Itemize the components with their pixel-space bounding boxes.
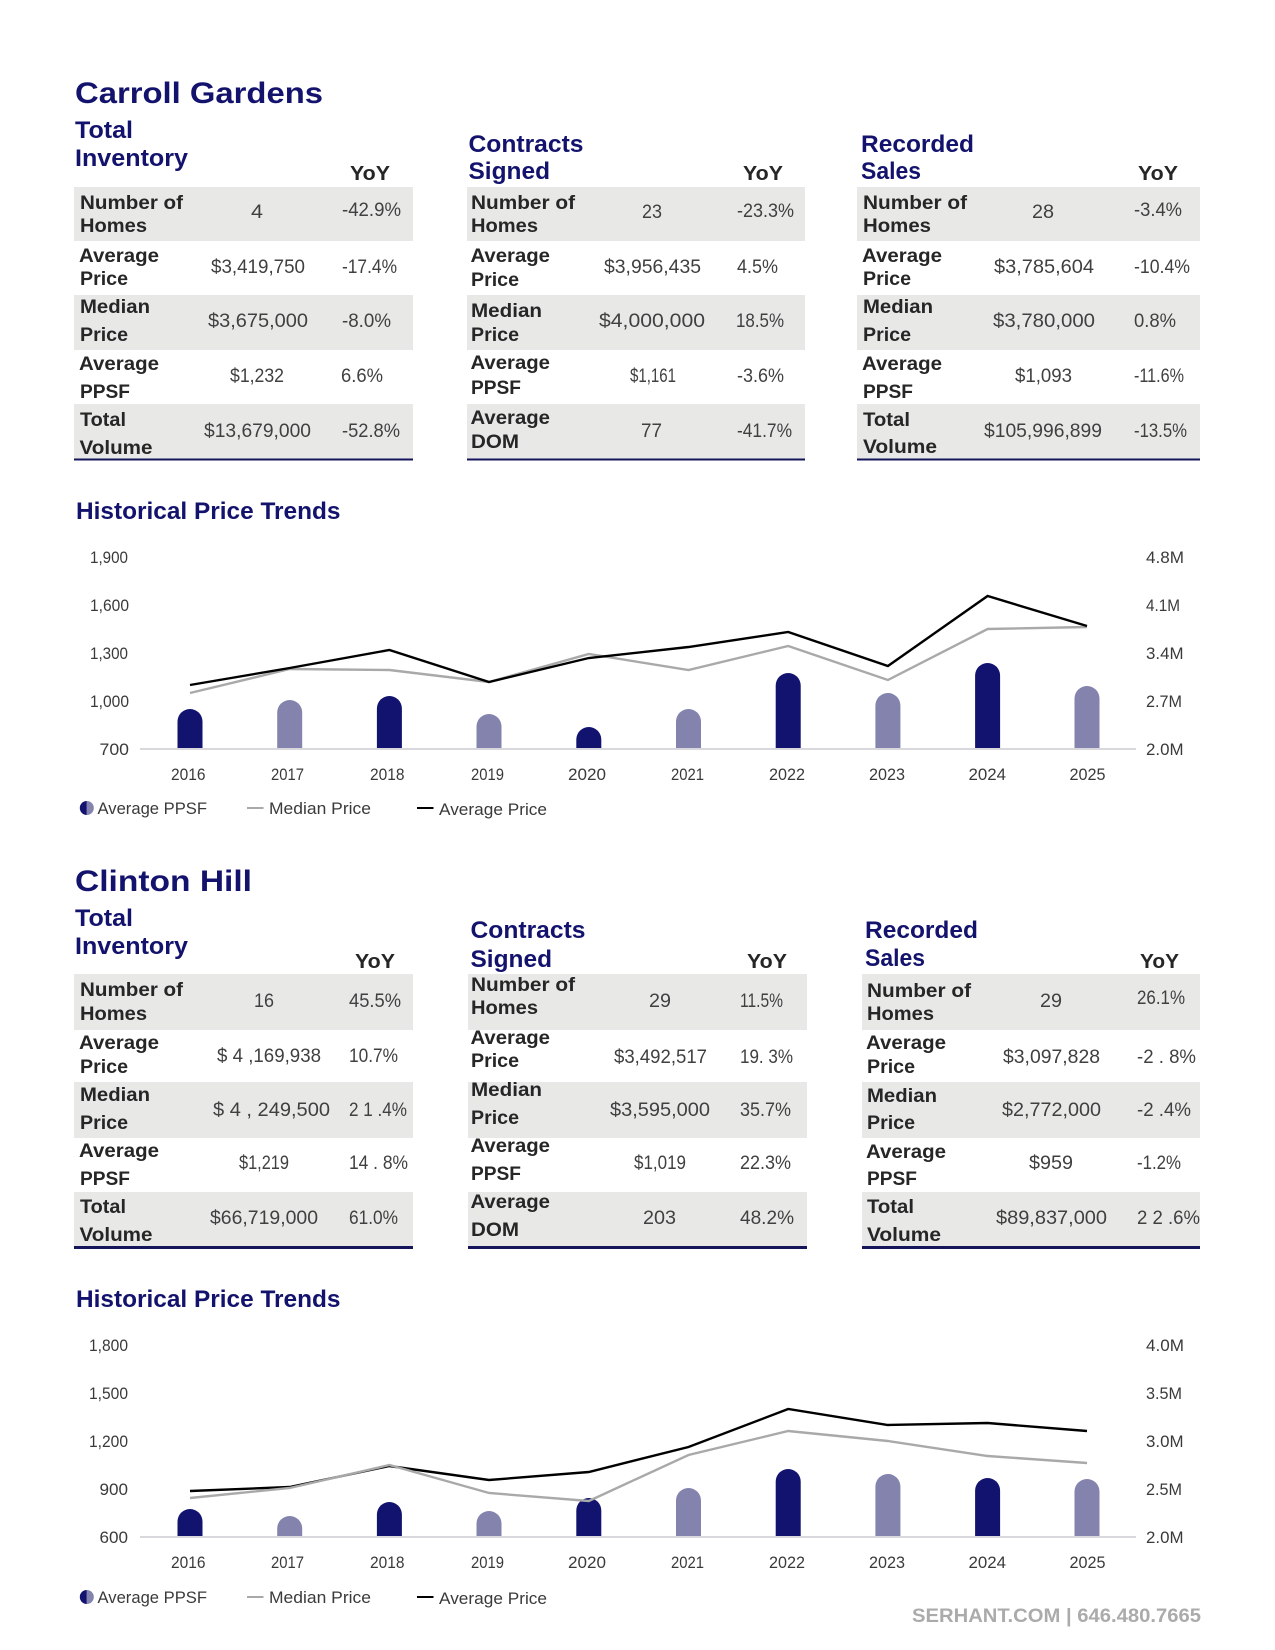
row: Median Price: Median [471,1080,542,1101]
row: Average Price: Price [471,1051,519,1072]
heading: Recorded Sales [865,917,978,972]
x axis years: 2018 [370,766,404,784]
row: Average DOM: 203 [643,1208,676,1229]
row: Average Price: Price [471,270,519,291]
row: Number of Homes: 28 [1032,202,1054,223]
row: Average PPSF [862,354,1184,403]
row: Median Price: 18.5% [736,311,784,332]
row: Average DOM: 77 [641,421,662,442]
row: Median Price: Median [471,301,542,322]
row: Number of Homes: Homes [471,216,538,237]
column heading: YoY: YoY [1140,951,1180,973]
left axis labels: 1,600 [90,597,129,615]
row: Number of Homes [467,187,805,241]
row: Median Price: Median [863,297,933,318]
row: Number of Homes: Number of [867,981,972,1002]
row: Number of Homes: Number of [80,980,184,1001]
row: Total Volume: Total [80,410,126,431]
row: Average PPSF: -3.6% [737,366,784,387]
row: Average Price [470,246,778,291]
heading: Recorded Sales [861,131,974,185]
heading: Historical Price Trends: Historical Price Trends [76,1286,340,1313]
heading: Contracts Signed: Signed [470,946,552,973]
row: Average Price: Price [80,269,128,290]
row: Average Price: 4.5% [737,257,778,278]
row: Average Price: $3,956,435 [604,257,701,278]
left axis labels: 1,500 [89,1385,128,1403]
heading: Contracts Signed [470,917,586,973]
row: Average DOM: DOM [471,1220,519,1241]
left axis labels: 1,300 [90,645,128,663]
row: Number of Homes: Homes [471,998,538,1019]
line: Median Price [190,1431,1087,1501]
row: Number of Homes: 45.5% [349,991,401,1012]
heading: Contracts Signed: Signed [468,158,550,185]
row: Number of Homes: -42.9% [342,200,401,221]
row: Average DOM [467,404,805,460]
row: Total Volume: Volume [867,1225,941,1246]
panel: Total Inventory table [74,905,413,1249]
row: Average Price: $3,419,750 [211,257,305,278]
row: Average PPSF: Average [866,1142,946,1163]
row: Median Price: -2 .4% [1137,1100,1191,1121]
row: Median Price: 35.7% [740,1100,791,1121]
row: Average PPSF: -11.6% [1134,366,1184,387]
row: Total Volume: -52.8% [342,421,400,442]
row: Average PPSF: Average [862,354,942,375]
heading: Recorded Sales: Recorded [865,917,978,944]
left axis labels: 1,200 [89,1433,128,1451]
baseline axis [140,748,1136,750]
left axis labels: 1,800 [89,1337,128,1355]
right axis labels: 2.0M [1146,1529,1184,1547]
row: Median Price: $2,772,000 [1002,1100,1101,1121]
x axis years: 2022 [769,1554,805,1572]
row: Average Price: $3,492,517 [614,1047,707,1068]
x axis years: 2021 [671,1554,704,1572]
row: Total Volume: $13,679,000 [204,421,311,442]
row: Number of Homes: 4 [251,202,263,223]
title: Carroll Gardens: Carroll Gardens [75,77,323,110]
x axis years: 2017 [271,766,304,784]
row: Average Price: $3,785,604 [994,257,1094,278]
row: Average PPSF [470,353,784,399]
panel: Contracts Signed table [468,917,807,1249]
left axis labels: 700 [100,741,129,759]
row: Total Volume [862,1192,1200,1249]
row: Average PPSF: $1,019 [634,1153,686,1174]
left axis labels: 900 [100,1481,128,1499]
row: Average PPSF: PPSF [80,1169,130,1190]
column heading: YoY: YoY [355,951,396,973]
x axis years: 2017 [271,1554,304,1572]
heading: Total Inventory: Total [75,905,133,932]
legend: Median Price [269,800,371,818]
row: Average PPSF [79,1141,408,1190]
x axis years [171,1554,1106,1572]
right axis labels [1146,549,1184,759]
row: Average DOM: -41.7% [737,421,792,442]
right axis labels: 3.0M [1146,1433,1184,1451]
left axis labels: 600 [100,1529,128,1547]
row: Average Price [862,246,1190,290]
section: Clinton Hill [74,865,1200,1608]
heading: Total Inventory [75,117,188,172]
line: Average Price [190,596,1087,685]
row: Average PPSF: 6.6% [341,366,383,387]
row: Average Price: Price [867,1057,915,1078]
row: Average PPSF [79,354,383,403]
panel: Total Inventory table [74,117,413,460]
row: Average PPSF [470,1136,791,1185]
row: Average DOM: Average [470,1192,550,1213]
section: Carroll Gardens [74,77,1200,819]
row: Median Price: Median [80,1085,150,1106]
row: Total Volume: Total [80,1197,126,1218]
row: Median Price [857,295,1200,350]
row: Number of Homes: 29 [649,991,671,1012]
left axis labels: 1,900 [90,549,128,567]
right axis labels: 2.7M [1146,693,1182,711]
row: Number of Homes: Homes [867,1004,934,1025]
right axis labels: 4.8M [1146,549,1184,567]
row: Median Price: $4,000,000 [599,311,705,332]
row: Median Price: 0.8% [1134,311,1176,332]
heading: Total Inventory: Inventory [75,145,188,172]
row: Total Volume: $105,996,899 [984,421,1102,442]
panel: Recorded Sales table [857,131,1200,460]
right axis labels: 2.5M [1146,1481,1182,1499]
row: Median Price: $ 4 , 249,500 [213,1100,330,1121]
right axis labels: 4.1M [1146,597,1180,615]
row: Average PPSF: $1,093 [1015,366,1072,387]
row: Average PPSF: Average [470,353,550,374]
line: Median Price [190,627,1087,693]
row: Average PPSF: Average [79,354,159,375]
row: Average Price: $3,097,828 [1003,1047,1100,1068]
x axis years: 2022 [769,766,805,784]
row: Average Price: Average [866,1033,946,1054]
row: Median Price [74,1082,413,1138]
row: Number of Homes: 26.1% [1137,988,1185,1009]
heading: Total Inventory: Inventory [75,933,188,960]
row: Total Volume: Volume [863,437,937,458]
left axis labels: 1,000 [90,693,129,711]
row: Number of Homes: -23.3% [737,201,794,222]
row: Median Price: $3,675,000 [208,311,308,332]
row: Total Volume: Total [867,1197,914,1218]
right axis labels: 3.5M [1146,1385,1182,1403]
bars: Average PPSF [178,663,1100,749]
row: Average PPSF: $1,219 [239,1153,289,1174]
row: Number of Homes [862,974,1200,1030]
row: Number of Homes [74,187,413,241]
column heading: YoY: YoY [350,163,391,185]
bars: Average PPSF [178,1469,1100,1537]
row: Average Price: -17.4% [342,257,397,278]
row: Number of Homes: 11.5% [740,991,783,1012]
row: Total Volume: -13.5% [1134,421,1187,442]
x axis years: 2019 [471,1554,504,1572]
row: Average Price: Average [470,1028,550,1049]
row: Average Price: Price [863,269,911,290]
row: Number of Homes: Number of [471,975,576,996]
row: Average DOM: Average [470,408,550,429]
row: Average Price: Average [79,246,159,267]
row: Median Price: $3,780,000 [993,311,1095,332]
x axis years: 2024 [968,1554,1006,1572]
row: Average Price: Average [470,246,550,267]
row: Number of Homes: Number of [863,193,968,214]
title: Clinton Hill: Clinton Hill [75,865,252,898]
x axis years: 2016 [171,766,206,784]
x axis years [171,766,1106,784]
line: Average Price [190,1409,1087,1491]
right axis labels: 4.0M [1146,1337,1184,1355]
legend: Average Price [439,1590,547,1608]
row: Average PPSF [866,1142,1181,1190]
panel: Contracts Signed table [467,131,805,460]
baseline axis [140,1536,1136,1538]
row: Median Price: 2 1 .4% [349,1100,407,1121]
x axis years: 2020 [568,766,606,784]
panel: Recorded Sales table [862,917,1200,1249]
row: Average PPSF: 22.3% [740,1153,791,1174]
row: Average PPSF: Average [470,1136,550,1157]
heading: Contracts Signed: Contracts [468,131,584,158]
row: Number of Homes: 23 [642,202,662,223]
heading: Contracts Signed [468,131,584,185]
heading: Total Inventory [75,905,188,960]
row: Average Price: 19. 3% [740,1047,793,1068]
row: Average DOM [468,1192,807,1249]
x axis years: 2025 [1070,766,1106,784]
row: Average PPSF: $1,161 [630,366,676,387]
row: Average Price: Average [862,246,942,267]
x axis years: 2020 [568,1554,606,1572]
row: Average Price [79,1033,398,1078]
legend: Average PPSF [98,1589,207,1607]
row: Number of Homes: 29 [1040,991,1062,1012]
row: Median Price [862,1082,1200,1138]
row: Total Volume [857,404,1200,460]
chart: Clinton Hill price trends [80,1337,1184,1608]
row: Number of Homes: Number of [80,193,184,214]
heading: Recorded Sales: Sales [861,158,921,185]
row: Median Price [467,295,805,350]
row: Average Price: Average [79,1033,159,1054]
x axis years: 2025 [1070,1554,1106,1572]
legend [80,800,547,819]
row: Average Price [470,1028,793,1072]
row: Total Volume: $66,719,000 [210,1208,318,1229]
heading: Historical Price Trends: Historical Price Trends [76,498,340,525]
row: Average PPSF: PPSF [471,378,521,399]
heading: Recorded Sales: Sales [865,945,925,972]
row: Average PPSF: Average [79,1141,159,1162]
row: Total Volume [74,1192,413,1249]
row: Number of Homes: 16 [254,991,274,1012]
row: Total Volume: Total [863,410,910,431]
row: Median Price: $3,595,000 [610,1100,710,1121]
row: Average PPSF: 14 . 8% [349,1153,408,1174]
legend: Median Price [269,1589,371,1607]
row: Number of Homes [468,974,807,1030]
row: Number of Homes: Homes [863,216,931,237]
right axis labels: 2.0M [1146,741,1184,759]
row: Median Price [74,295,413,350]
column heading: YoY: YoY [743,163,784,185]
legend: Average Price [439,801,547,819]
heading: Recorded Sales: Recorded [861,131,974,158]
legend: Average PPSF [98,800,207,818]
row: Median Price: -8.0% [342,311,391,332]
right axis labels: 3.4M [1146,645,1184,663]
row: Average PPSF: $1,232 [230,366,284,387]
row: Median Price: Price [80,325,128,346]
row: Median Price: Price [471,325,519,346]
row: Number of Homes [857,187,1200,241]
heading: Total Inventory: Total [75,117,133,144]
row: Median Price: Price [80,1113,128,1134]
row: Number of Homes: Homes [80,216,147,237]
x axis years: 2018 [370,1554,404,1572]
row: Average Price: -2 . 8% [1137,1047,1196,1068]
row: Average Price: $ 4 ,169,938 [217,1046,321,1067]
row: Average DOM: 48.2% [740,1208,794,1229]
row: Median Price: Median [80,297,150,318]
row: Median Price [468,1080,807,1138]
row: Total Volume: $89,837,000 [996,1208,1107,1229]
heading: Contracts Signed: Contracts [470,917,586,944]
x axis years: 2023 [869,766,905,784]
column heading: YoY: YoY [747,951,788,973]
row: Average PPSF: PPSF [80,382,130,403]
row: Number of Homes: Homes [80,1004,147,1025]
row: Number of Homes [74,974,413,1030]
x axis years: 2023 [869,1554,905,1572]
row: Average Price [79,246,397,290]
left axis labels [90,549,129,759]
row: Number of Homes: -3.4% [1134,200,1182,221]
x axis years: 2016 [171,1554,206,1572]
x axis years: 2024 [968,766,1006,784]
row: Median Price: Median [867,1086,937,1107]
row: Average PPSF: PPSF [867,1169,917,1190]
x axis years: 2021 [671,766,704,784]
row: Average Price: 10.7% [349,1046,398,1067]
row: Average DOM: DOM [471,432,519,453]
x axis years: 2019 [471,766,504,784]
row: Total Volume: Volume [80,438,152,459]
row: Average PPSF: PPSF [863,382,913,403]
row: Average Price [866,1033,1196,1078]
row: Average Price: -10.4% [1134,257,1190,278]
row: Total Volume [74,404,413,460]
legend [80,1589,547,1608]
footer contact: SERHANT.COM | 646.480.7665 [912,1605,1201,1627]
row: Median Price: Price [863,325,911,346]
row: Number of Homes: Number of [471,193,576,214]
row: Total Volume: Volume [80,1225,152,1246]
row: Average PPSF: PPSF [471,1164,521,1185]
row: Average PPSF: -1.2% [1137,1153,1181,1174]
row: Median Price: Price [471,1108,519,1129]
left axis labels [89,1337,128,1547]
right axis labels [1146,1337,1184,1547]
row: Total Volume: 61.0% [349,1208,398,1229]
row: Median Price: Price [867,1113,915,1134]
row: Average Price: Price [80,1057,128,1078]
column heading: YoY: YoY [1138,163,1179,185]
chart: Carroll Gardens price trends [80,549,1184,819]
row: Average PPSF: $959 [1029,1153,1073,1174]
row: Total Volume: 2 2 .6% [1137,1208,1200,1229]
